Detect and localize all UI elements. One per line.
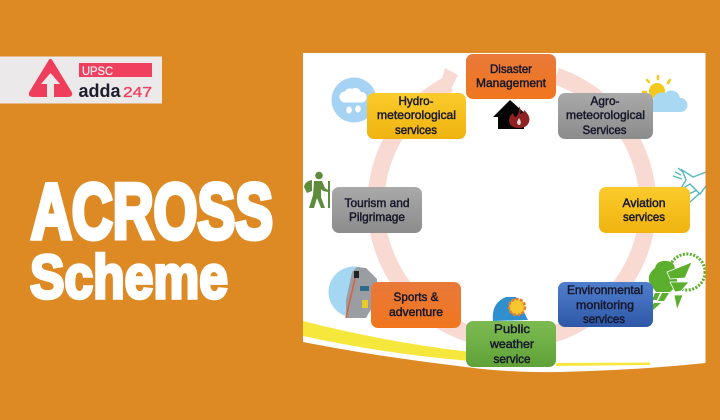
box: Public weather service: Public (494, 322, 530, 336)
box: Public weather service: weather (489, 337, 534, 351)
logo: UPSC adda247: UPSC (82, 66, 113, 78)
yellow swoosh (303, 321, 650, 366)
box: Disaster Management: Disaster (490, 62, 532, 76)
box: Aviation services (599, 187, 690, 233)
box: Aviation services: services (623, 210, 665, 224)
box: Public weather service: service (494, 352, 531, 366)
cycle ring arrow (376, 68, 648, 341)
icon: airplane outline (673, 168, 706, 203)
box: Tourism and Pilgrimage: Tourism and (344, 196, 410, 210)
icon: rain cloud (332, 78, 376, 122)
logo: UPSC adda247 (0, 56, 162, 104)
box: Agro-meteorological Services: Agro- (590, 94, 620, 108)
box: Environmental monitoring services: Environmental (567, 283, 643, 297)
icon: house with flame (493, 100, 529, 129)
icon: public weather sun and cloud (493, 297, 528, 321)
box: Tourism and Pilgrimage (332, 187, 422, 233)
box: Disaster Management (466, 54, 556, 99)
box: Agro-meteorological Services (558, 93, 653, 139)
title: ACROSS Scheme: ACROSS (31, 167, 273, 255)
box: Environmental monitoring services: monitoring (576, 298, 634, 312)
box: Sports & adventure (371, 282, 461, 328)
box: Agro-meteorological Services: meteorological (566, 108, 645, 122)
icon: sun and cloud (643, 76, 688, 112)
box: Tourism and Pilgrimage: Pilgrimage (349, 210, 405, 224)
box: Aviation services: Aviation (622, 196, 666, 210)
box: Disaster Management: Management (476, 76, 547, 90)
box: Public weather service (466, 321, 556, 367)
title: ACROSS Scheme: Scheme (30, 243, 228, 311)
box: Sports & adventure: Sports & (394, 290, 438, 304)
box: Hydro-meteorological services: Hydro- (398, 94, 434, 108)
box: Agro-meteorological Services: Services (582, 123, 626, 137)
panel: white diagram background (303, 53, 706, 372)
box: Environmental monitoring services: services (583, 312, 625, 326)
box: Hydro-meteorological services (367, 93, 466, 139)
icon: sports climber (328, 266, 380, 318)
logo: UPSC adda247: adda (78, 81, 121, 101)
box: Sports & adventure: adventure (389, 305, 443, 319)
box: Environmental monitoring services (558, 282, 653, 327)
icon: green storm cloud and tornado (649, 254, 705, 310)
icon: hiker (304, 172, 330, 208)
logo: UPSC adda247: 247 (123, 84, 152, 101)
title: ACROSS Scheme (30, 167, 273, 311)
box: Hydro-meteorological services: services (395, 123, 437, 137)
box: Hydro-meteorological services: meteorological (377, 108, 456, 122)
